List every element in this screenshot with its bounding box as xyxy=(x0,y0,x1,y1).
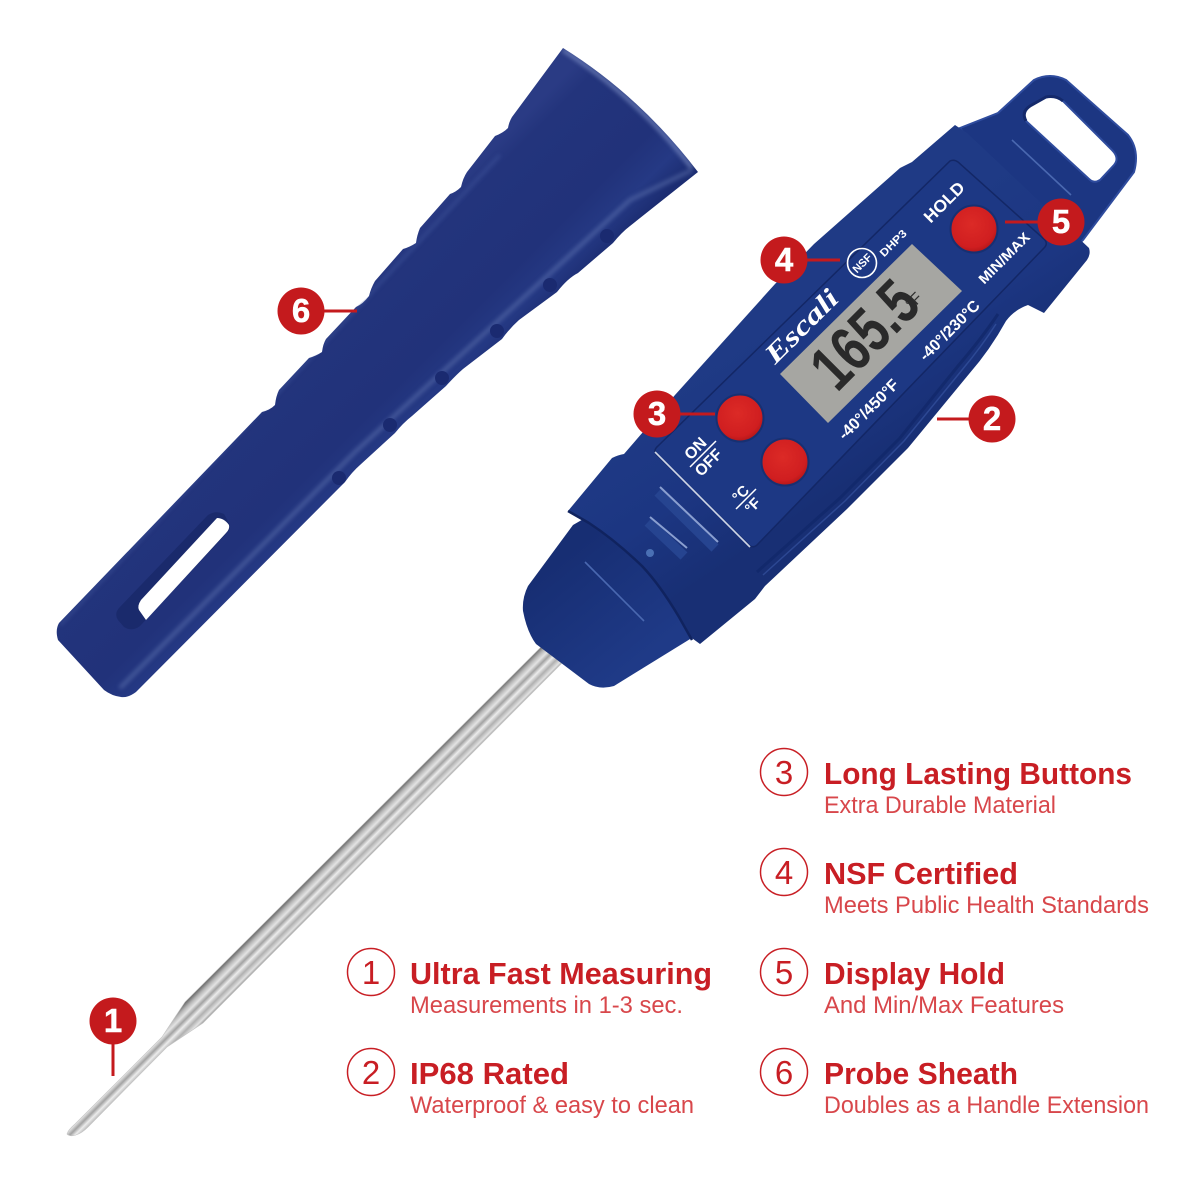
legend item 1 xyxy=(348,948,712,1019)
legend item 1: Measurements in 1-3 sec. xyxy=(410,992,683,1019)
sheath highlights xyxy=(60,50,692,688)
legend item 1: 1 xyxy=(362,954,380,991)
legend item 5: Display Hold xyxy=(824,956,1005,991)
legend item 2: Waterproof & easy to clean xyxy=(410,1092,694,1119)
loop hole inner shadow xyxy=(1024,96,1063,121)
legend item 3 xyxy=(760,748,1132,819)
range C: -40°/230°C xyxy=(916,297,984,365)
legend item 4: 4 xyxy=(775,854,793,891)
legend item 5: 5 xyxy=(775,954,793,991)
label HOLD: HOLD xyxy=(920,178,969,227)
legend item 5: And Min/Max Features xyxy=(824,992,1064,1019)
callout 6: 6 xyxy=(292,292,310,329)
temperature reading: 165.5 xyxy=(796,266,933,403)
range F: -40°/450°F xyxy=(835,376,903,444)
legend item 2 xyxy=(348,1048,694,1119)
callout 1 xyxy=(90,998,136,1076)
label C/F: °F xyxy=(742,495,764,517)
indicator dot xyxy=(646,549,654,557)
legend item 5 xyxy=(760,948,1064,1019)
legend item 4: NSF Certified xyxy=(824,856,1018,891)
callout 2: 2 xyxy=(983,400,1001,437)
legend item 6: Probe Sheath xyxy=(824,1056,1018,1091)
tip cap xyxy=(523,495,705,688)
LCD display xyxy=(780,244,962,423)
thermometer xyxy=(523,76,1136,688)
legend item 3: 3 xyxy=(775,754,793,791)
button: hold xyxy=(950,206,998,252)
callout 3: 3 xyxy=(648,395,666,432)
body lower contour xyxy=(757,314,998,575)
button: on/off xyxy=(716,394,764,442)
NSF mark: NSF xyxy=(851,251,875,276)
body step shadow xyxy=(568,511,692,640)
legend item 6 xyxy=(760,1048,1149,1119)
unit reading: °F xyxy=(903,289,926,313)
label C/F: °C xyxy=(729,482,753,506)
logo: Escali: Escali xyxy=(757,283,845,370)
legend item 4: Meets Public Health Standards xyxy=(824,892,1149,919)
callout 6 xyxy=(278,288,357,334)
callout 2 xyxy=(937,396,1016,442)
probe sheath xyxy=(57,48,698,697)
callout 3 xyxy=(634,390,715,438)
hanging loop xyxy=(960,76,1136,262)
grip ridges xyxy=(648,487,718,556)
label C/F xyxy=(729,482,764,517)
label MIN/MAX: MIN/MAX xyxy=(975,229,1033,287)
label ON/OFF xyxy=(682,435,726,480)
callout 1: 1 xyxy=(104,1002,122,1039)
model DHP3: DHP3 xyxy=(878,228,910,260)
legend item 2: 2 xyxy=(362,1054,380,1091)
legend item 6: 6 xyxy=(775,1054,793,1091)
label ON/OFF: OFF xyxy=(692,446,726,480)
sheath slot opening xyxy=(138,518,229,620)
NSF mark xyxy=(848,248,876,278)
legend item 6: Doubles as a Handle Extension xyxy=(824,1092,1149,1119)
button: unit toggle xyxy=(762,438,808,486)
label ON/OFF: ON xyxy=(682,435,711,464)
metal probe xyxy=(67,640,568,1136)
legend item 2: IP68 Rated xyxy=(410,1056,569,1091)
cap and loop lines xyxy=(585,140,1071,621)
callout 5: 5 xyxy=(1052,203,1070,240)
legend item 3: Long Lasting Buttons xyxy=(824,756,1132,791)
legend item 4 xyxy=(760,848,1149,919)
plate highlight xyxy=(655,452,750,547)
legend item 3: Extra Durable Material xyxy=(824,792,1056,819)
sheath slot recess xyxy=(116,512,230,629)
face plate xyxy=(655,160,1046,547)
main body xyxy=(568,125,1090,644)
callout 5 xyxy=(1005,198,1084,246)
legend item 1: Ultra Fast Measuring xyxy=(410,956,712,991)
callout 4 xyxy=(760,236,840,284)
callout 4: 4 xyxy=(775,241,794,278)
